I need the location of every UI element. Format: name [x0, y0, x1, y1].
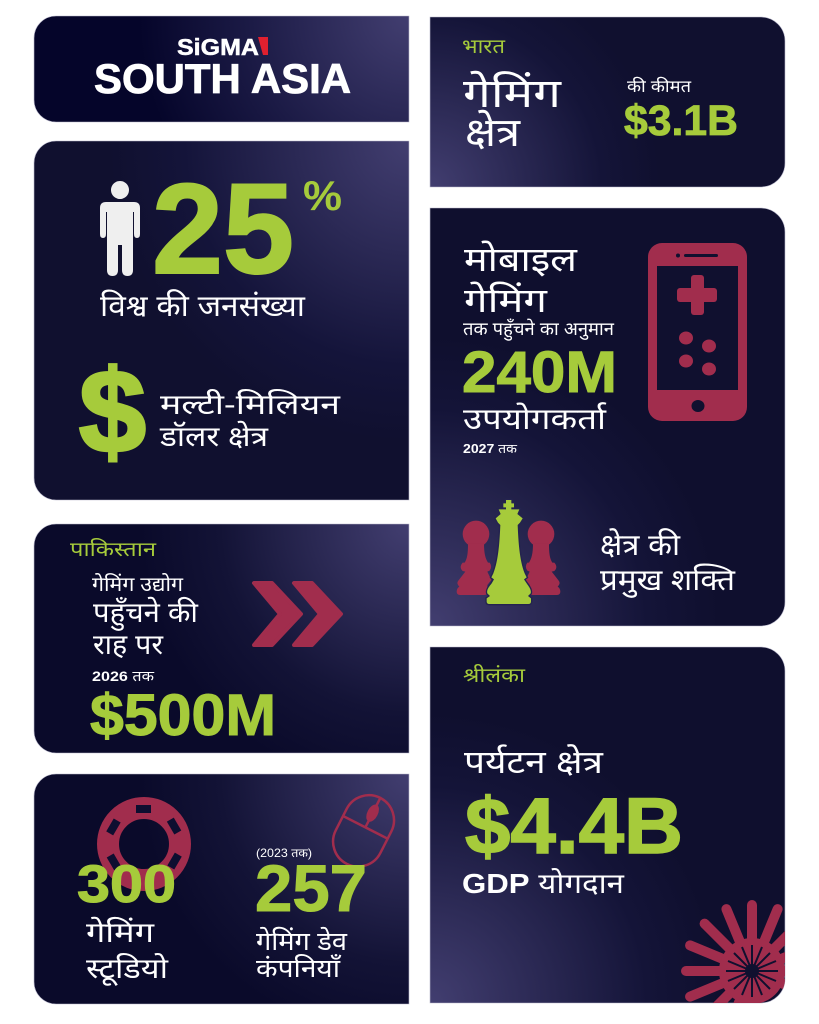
text: by 2026: 2026 तक — [92, 668, 154, 684]
stat: 4.4B: $4.4B — [465, 781, 683, 870]
stat: 257: 257 — [255, 851, 367, 925]
stat: 300: 300 — [77, 855, 176, 914]
icon: chess pieces — [457, 500, 560, 604]
text: multi-million dollar sector: डॉलर क्षेत्र — [159, 420, 269, 452]
text: gaming dev companies: गेमिंग डेव — [256, 926, 348, 956]
text: gaming studios — [86, 916, 169, 986]
text: GDP contribution: GDP योगदान — [462, 867, 625, 899]
icon: mobile phone with game controls — [648, 243, 747, 421]
logo: red flag — [258, 37, 268, 55]
text: as of 2023: (2023 तक) — [256, 846, 312, 860]
panel: studios and companies — [34, 774, 409, 1004]
text: gaming sector — [463, 71, 563, 155]
text: gaming industry: गेमिंग उद्योग — [92, 572, 184, 596]
label: Pakistan: पाकिस्तान — [70, 537, 157, 561]
stat: 240M: 240M — [462, 340, 617, 405]
icon: person — [100, 181, 140, 276]
stat: 500M: $500M — [90, 683, 276, 748]
text: key power of the region: प्रमुख शक्ति — [600, 563, 736, 598]
panel: logo header — [34, 16, 409, 122]
text: gaming dev companies — [256, 926, 348, 983]
text: users: उपयोगकर्ता — [463, 402, 607, 436]
text: on the way to reaching — [93, 596, 199, 660]
panel: population and sector — [34, 141, 409, 500]
text: mobile gaming: गेमिंग — [464, 281, 548, 320]
icon: firework burst — [681, 900, 785, 1003]
text: gaming sector: गेमिंग — [463, 71, 563, 116]
panel: Sri Lanka — [430, 646, 786, 1004]
text: gaming studios: गेमिंग — [86, 916, 156, 948]
text: tourism sector: पर्यटन क्षेत्र — [464, 744, 605, 780]
text: on the way to reaching: राह पर — [93, 629, 164, 660]
label: Sri Lanka: श्रीलंका — [463, 663, 526, 687]
text: on the way to reaching: पहुँचने की — [93, 596, 199, 631]
icon: computer mouse — [324, 787, 403, 875]
text: key power of the region — [600, 527, 736, 598]
text: multi-million dollar sector: मल्टी-मिलियन — [160, 388, 341, 420]
text: mobile gaming — [464, 241, 578, 320]
icon: dollar sign: $ — [79, 346, 146, 478]
text: projected to reach: तक पहुँचने का अनुमान — [463, 318, 615, 341]
text: by 2027: 2027 तक — [463, 441, 518, 456]
text: gaming dev companies: कंपनियाँ — [256, 953, 342, 983]
panel: mobile gaming — [430, 208, 785, 626]
label: India: भारत — [462, 36, 506, 58]
panel: Pakistan — [34, 524, 409, 753]
logo: SiGMA wordmark: SiGMA — [177, 34, 259, 60]
icon: poker chip — [106, 805, 182, 880]
stat: percent sign: % — [303, 172, 342, 219]
stat: 3.1B: $3.1B — [624, 97, 738, 145]
text: gaming sector: क्षेत्र — [465, 110, 521, 155]
icon: double chevron — [254, 583, 341, 645]
text: valued at: की कीमत — [627, 76, 691, 96]
text: world population: विश्व की जनसंख्या — [100, 289, 306, 323]
text: mobile gaming: मोबाइल — [464, 241, 578, 279]
text: multi-million dollar sector — [159, 388, 341, 452]
text: gaming studios: स्टूडियो — [86, 952, 169, 986]
heading: South Asia: SOUTH ASIA — [94, 55, 351, 102]
stat: 25 percent: 25 — [152, 158, 294, 301]
panel: India — [430, 17, 785, 187]
text: key power of the region: क्षेत्र की — [600, 527, 681, 562]
